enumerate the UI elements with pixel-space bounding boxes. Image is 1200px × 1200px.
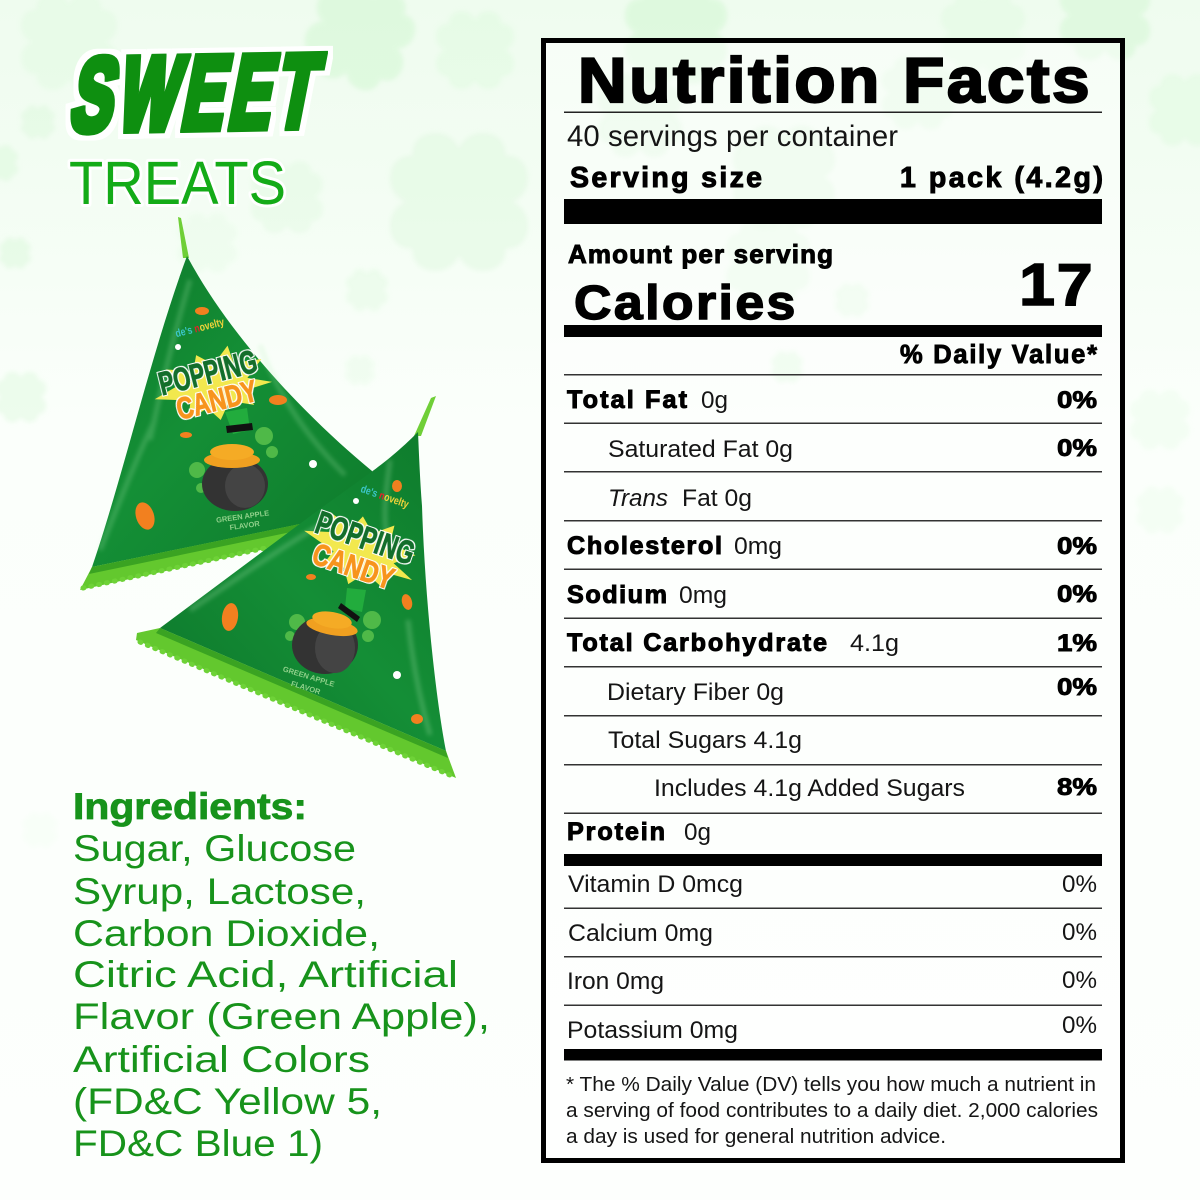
ingredients list: Flavor (Green Apple), bbox=[73, 996, 490, 1037]
ingredients list: Syrup, Lactose, bbox=[73, 871, 366, 912]
row: sodium bbox=[567, 581, 1097, 609]
row: total carbohydrate: 4.1g bbox=[850, 630, 899, 657]
row: vitamin d: 0% bbox=[1062, 871, 1097, 898]
footnote: * The % Daily Value (DV) tells you how much a nutrient in bbox=[566, 1073, 1096, 1096]
pack text: popping: POPPING bbox=[311, 504, 419, 572]
servings per container: 40 servings per container bbox=[567, 120, 898, 153]
pack logo text: de's novelty bbox=[174, 316, 226, 340]
pack art: pot of gold bbox=[285, 588, 381, 674]
serving size row bbox=[570, 162, 1103, 194]
row: saturated fat: Saturated Fat 0g bbox=[608, 436, 793, 463]
row: total fat: Total Fat bbox=[567, 386, 688, 414]
heading word: SWEET: SWEET bbox=[64, 33, 335, 154]
row: total carbohydrate bbox=[567, 629, 1097, 657]
row: potassium: 0% bbox=[1062, 1012, 1097, 1039]
pack text: flavor: FLAVOR bbox=[290, 679, 322, 697]
heading word: TREATS: TREATS bbox=[69, 149, 286, 217]
row: saturated fat bbox=[608, 435, 1097, 463]
row: total carbohydrate: Total Carbohydrate bbox=[567, 629, 827, 657]
footnote: a day is used for general nutrition advice. bbox=[566, 1125, 946, 1148]
row: total carbohydrate: 1% bbox=[1057, 630, 1097, 657]
row: cholesterol bbox=[567, 532, 1097, 560]
pack art: coins and stars bbox=[220, 480, 423, 724]
row: iron bbox=[567, 967, 1097, 995]
row: sodium: 0% bbox=[1057, 581, 1097, 608]
row: potassium: Potassium 0mg bbox=[567, 1017, 738, 1044]
ingredients list: Artificial Colors bbox=[73, 1039, 370, 1080]
serving size row: Serving size bbox=[570, 162, 762, 194]
pack text: popping: POPPING bbox=[155, 343, 261, 402]
row: potassium bbox=[567, 1012, 1097, 1044]
row: sodium: Sodium bbox=[567, 581, 667, 609]
heading: Sweet Treats bbox=[64, 33, 335, 217]
product: popping candy pack, back bbox=[80, 217, 372, 590]
row: trans fat bbox=[608, 485, 752, 512]
pack art: burst and logo bbox=[139, 309, 278, 434]
ingredients list bbox=[73, 828, 490, 1164]
row: sodium: 0mg bbox=[679, 582, 727, 609]
row: trans fat: Trans bbox=[608, 485, 668, 512]
row: calcium bbox=[568, 919, 1097, 947]
row: vitamin d bbox=[568, 871, 1097, 898]
serving size row: 1 pack (4.2g) bbox=[900, 162, 1103, 194]
pack logo text: de's novelty bbox=[359, 483, 411, 511]
row: vitamin d: Vitamin D 0mcg bbox=[568, 871, 743, 898]
row: total sugars: Total Sugars 4.1g bbox=[608, 727, 802, 754]
calories block: Amount per serving bbox=[568, 239, 833, 269]
pack text: flavor: GREEN APPLE bbox=[282, 664, 336, 689]
title: Nutrition Facts bbox=[578, 45, 1089, 116]
footnote: a serving of food contributes to a daily diet. 2,000 calories bbox=[566, 1099, 1098, 1122]
ingredients list: Sugar, Glucose bbox=[73, 828, 356, 869]
row: protein: Protein bbox=[567, 818, 665, 846]
ingredients list: Carbon Dioxide, bbox=[73, 913, 380, 954]
ingredients text block bbox=[73, 786, 490, 1164]
pack art: coins and stars bbox=[132, 307, 317, 532]
ingredients heading: Ingredients: bbox=[73, 786, 307, 827]
row: protein bbox=[567, 818, 711, 846]
row: calcium: 0% bbox=[1062, 919, 1097, 946]
row: saturated fat: 0% bbox=[1057, 435, 1097, 462]
row: iron: 0% bbox=[1062, 967, 1097, 994]
row: protein: 0g bbox=[684, 819, 711, 846]
ingredients list: FD&C Blue 1) bbox=[73, 1123, 323, 1164]
pack text: flavor bbox=[216, 508, 270, 532]
calories block bbox=[568, 239, 1093, 330]
row: total fat: 0g bbox=[701, 387, 728, 414]
calories block: Calories bbox=[574, 276, 795, 330]
row: dietary fiber bbox=[607, 674, 1097, 706]
footnote bbox=[566, 1073, 1098, 1148]
row: added sugars: Includes 4.1g Added Sugars bbox=[654, 775, 965, 802]
pack art: burst and logo bbox=[292, 470, 437, 603]
row: total fat bbox=[567, 386, 1097, 414]
product: popping candy pack, front bbox=[136, 396, 456, 778]
pack text: candy: CANDY bbox=[308, 536, 399, 597]
row: dietary fiber: Dietary Fiber 0g bbox=[607, 679, 784, 706]
ingredients list: (FD&C Yellow 5, bbox=[73, 1081, 382, 1122]
row: added sugars bbox=[654, 774, 1097, 802]
row: added sugars: 8% bbox=[1057, 774, 1097, 801]
row: total fat: 0% bbox=[1057, 387, 1097, 414]
row: trans fat: Fat 0g bbox=[682, 485, 752, 512]
row: cholesterol: 0% bbox=[1057, 533, 1097, 560]
ingredients list: Citric Acid, Artificial bbox=[73, 954, 458, 995]
pack art: pot of gold bbox=[189, 408, 278, 511]
pack text: candy: CANDY bbox=[173, 373, 261, 427]
panel: nutrition facts label bbox=[544, 40, 1122, 1160]
pack text: flavor: FLAVOR bbox=[229, 519, 261, 532]
row: calcium: Calcium 0mg bbox=[568, 920, 713, 947]
row: cholesterol: Cholesterol bbox=[567, 532, 722, 560]
daily value heading: % Daily Value* bbox=[900, 341, 1097, 369]
pack text: flavor: GREEN APPLE bbox=[216, 508, 270, 525]
row: cholesterol: 0mg bbox=[734, 533, 782, 560]
row: iron: Iron 0mg bbox=[567, 968, 664, 995]
calories block: 17 bbox=[1019, 253, 1093, 318]
row: dietary fiber: 0% bbox=[1057, 674, 1097, 701]
